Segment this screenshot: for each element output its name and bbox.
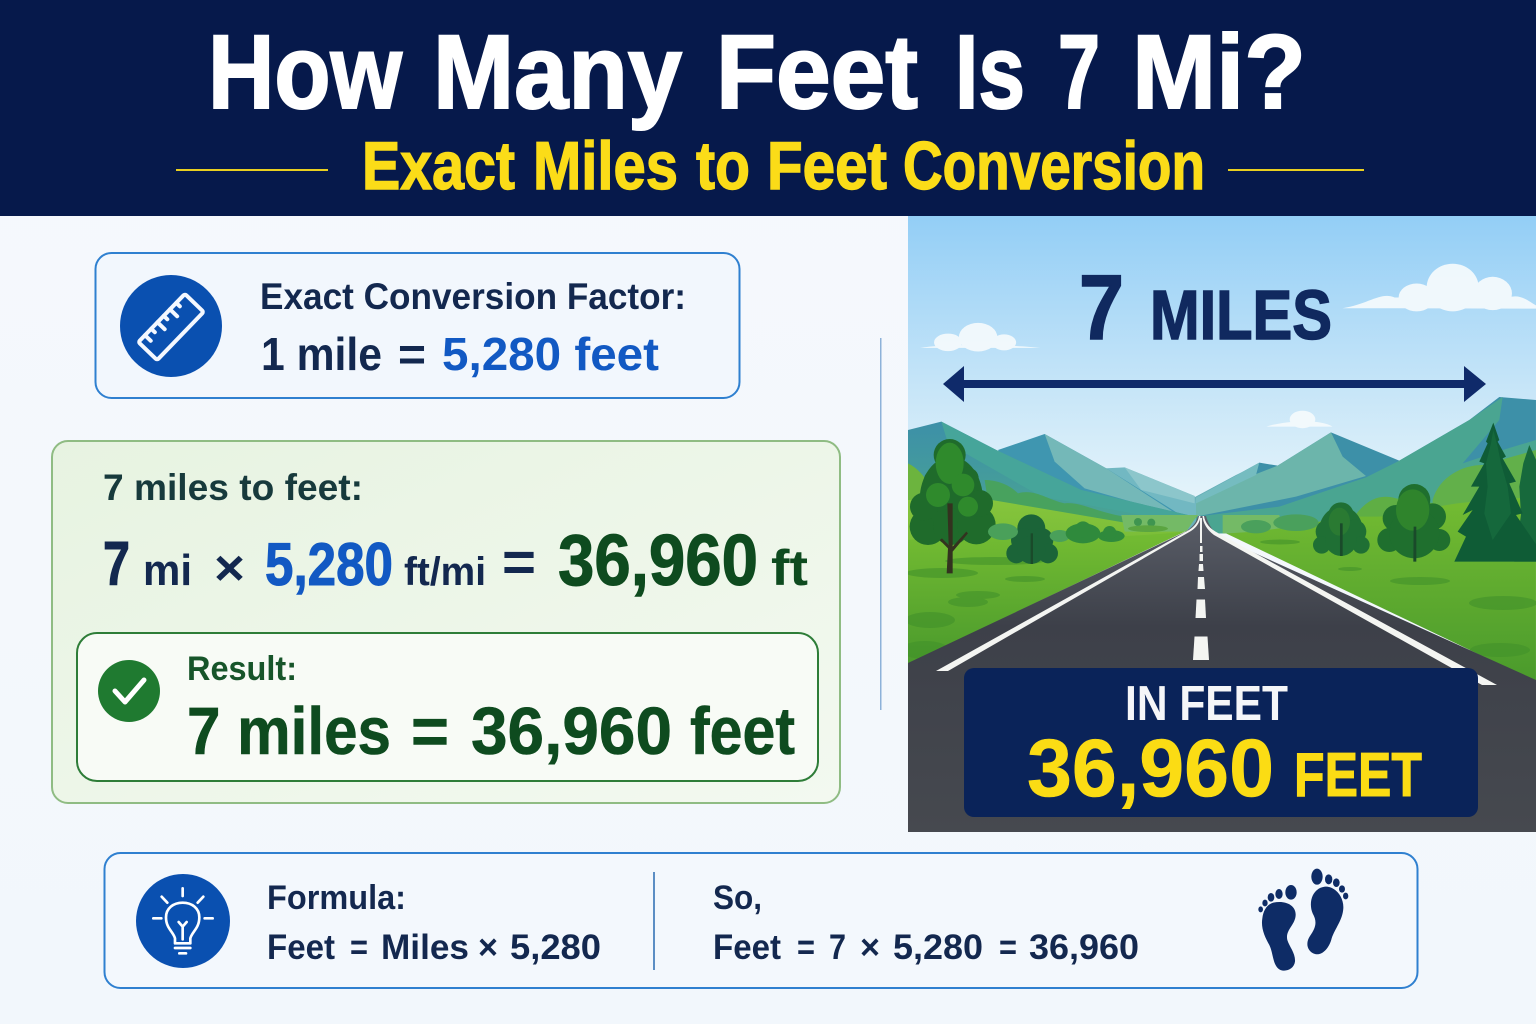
factor value: 5,280 feet	[442, 328, 659, 380]
calculation equation: 36,960	[558, 521, 758, 601]
worked expression: ×	[860, 928, 880, 967]
clouds	[920, 264, 1536, 428]
panel: calculation	[52, 441, 840, 803]
calculation equation: ft	[771, 540, 808, 596]
valley mountains	[1188, 472, 1242, 530]
calculation equation: 5,280	[265, 531, 393, 598]
icon: footprints	[1258, 869, 1348, 971]
icon: light bulb	[136, 874, 230, 968]
right mountains	[1196, 397, 1536, 533]
subtitle: to	[696, 128, 750, 204]
formula label: Formula:	[267, 879, 406, 917]
trees right	[1241, 484, 1450, 562]
bushes left	[988, 518, 1168, 543]
header band	[0, 0, 1536, 216]
pine trees	[1454, 423, 1536, 562]
formula expression: =	[350, 928, 368, 967]
result plate: FEET	[1294, 741, 1422, 810]
calculation equation: ft/mi	[404, 550, 486, 594]
formula expression: Miles	[381, 928, 469, 967]
title: 7	[1058, 14, 1100, 131]
title: Feet	[716, 14, 918, 131]
road centre dashes	[1193, 518, 1209, 660]
calculation label: 7 miles to feet:	[103, 467, 363, 508]
7 miles label: MILES	[1150, 276, 1332, 354]
result plate: IN FEET	[1125, 677, 1288, 731]
result plate: 36,960	[1027, 723, 1274, 814]
calculation equation: mi	[143, 546, 192, 595]
formula expression	[267, 928, 601, 967]
left mountains	[908, 422, 1196, 516]
result value: 7 miles	[187, 694, 391, 769]
subtitle: Exact	[362, 128, 515, 204]
worked expression: 7	[829, 928, 846, 967]
worked expression: =	[999, 928, 1017, 967]
road edge lines	[936, 516, 1497, 685]
subtitle: Conversion	[903, 128, 1205, 204]
title: How	[208, 14, 402, 131]
worked expression: 36,960	[1029, 928, 1139, 967]
result box	[77, 633, 818, 781]
worked expression	[713, 928, 1139, 967]
divider	[880, 338, 882, 710]
worked expression: =	[797, 928, 815, 967]
factor label: Exact Conversion Factor:	[260, 276, 686, 317]
title	[208, 14, 1306, 131]
7 miles label	[1082, 274, 1330, 340]
panel: road illustration	[901, 216, 1536, 832]
worked label: So,	[713, 879, 762, 917]
7 miles label: 7	[1079, 257, 1124, 359]
factor value: =	[398, 328, 426, 380]
road	[908, 516, 1536, 832]
result value: feet	[690, 694, 795, 769]
lower grass	[908, 532, 1185, 664]
icon: ruler	[120, 275, 222, 377]
distance arrow	[943, 366, 1486, 402]
formula expression: 5,280	[510, 928, 601, 967]
title: Mi?	[1132, 14, 1306, 131]
panel: formula	[104, 853, 1418, 988]
title: Many	[433, 14, 682, 131]
result label: Result:	[187, 650, 297, 688]
calculation equation: ×	[214, 540, 245, 596]
calculation equation: 7	[103, 530, 130, 599]
result value: =	[411, 694, 449, 769]
worked expression: 5,280	[893, 928, 983, 967]
calculation equation	[103, 521, 808, 601]
tree left small	[1006, 514, 1058, 564]
subtitle	[362, 128, 1205, 204]
tree left large	[910, 439, 996, 573]
factor value: 1 mile	[261, 328, 382, 380]
formula expression: ×	[478, 928, 498, 967]
calculation equation: =	[502, 530, 536, 593]
grass tufts	[901, 540, 1536, 659]
subtitle: Feet	[767, 128, 887, 204]
result plate	[964, 668, 1478, 817]
treelines and hills left	[908, 464, 1198, 620]
formula expression: Feet	[267, 928, 335, 967]
worked expression: Feet	[713, 928, 781, 967]
panel: conversion factor	[96, 253, 740, 398]
title: Is	[955, 14, 1025, 131]
result value: 36,960	[471, 694, 672, 769]
icon: check mark	[98, 660, 160, 722]
factor value	[261, 328, 659, 380]
subtitle: Miles	[533, 128, 678, 204]
sky	[908, 216, 1536, 526]
fields right	[1226, 497, 1536, 682]
result value	[187, 694, 795, 769]
